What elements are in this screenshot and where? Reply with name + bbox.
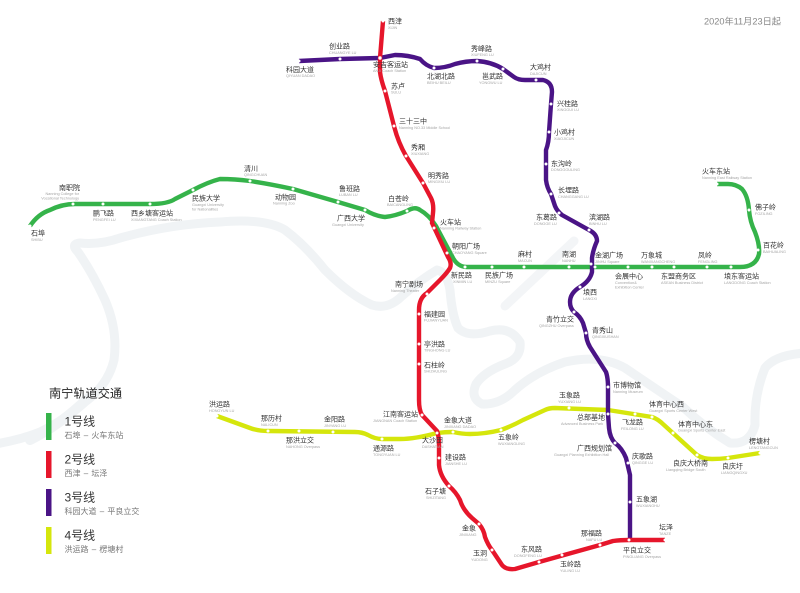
station labels: LANGDONG Coach Station [724, 281, 771, 285]
station labels: 白苍岭 [388, 194, 409, 203]
legend [46, 386, 139, 554]
station labels: TINGHONG LU [424, 348, 451, 352]
station labels: 体育中心东 [678, 420, 713, 428]
station labels: MINGXIU LU [428, 180, 450, 184]
station labels: 鹏飞路 [93, 208, 114, 218]
station labels: 金象 [462, 524, 476, 532]
station labels: XINGGUI LU [557, 108, 579, 112]
station labels: YUXIANG LU [558, 400, 581, 404]
station labels: BINHU LU [589, 222, 607, 226]
station labels: 新民路 [451, 270, 472, 280]
station labels: CHAOYANG Square [452, 251, 487, 255]
station labels: NANHU [562, 259, 576, 263]
station labels: 玉洞 [473, 548, 487, 558]
legend: line 1 [46, 413, 123, 440]
station labels: 广西大学 [337, 214, 365, 222]
station labels: DONGGE LU [534, 222, 557, 226]
station labels: 滨湖路 [589, 212, 610, 222]
station labels: CHUANGYE LU [329, 51, 357, 55]
station labels: 百花岭 [763, 240, 784, 250]
station labels: XIAOJICUN [554, 137, 575, 141]
station labels: 市博物馆 [613, 380, 641, 390]
station labels: 青竹立交 [546, 314, 574, 324]
station labels: SULU [391, 90, 401, 94]
station labels: 麻村 [518, 250, 532, 258]
station labels: 石子塘 [425, 486, 446, 496]
station labels: SHIBU [31, 238, 43, 242]
legend: line 2: 西津 – 坛泽 [64, 468, 107, 478]
station labels: FUJIANYUAN [424, 318, 448, 322]
station labels: 秀厢 [411, 142, 425, 152]
station labels: LUBAN LU [339, 193, 358, 197]
station labels: 南职院 [59, 183, 80, 192]
station labels: 大鸡村 [530, 62, 551, 72]
station labels: Nanning Museum [613, 390, 643, 394]
station labels: DASHATIAN [422, 445, 444, 449]
station labels: 庆歌路 [632, 452, 653, 460]
station labels: DAJICUN [530, 72, 547, 76]
station labels: Nanning Railway Station [440, 226, 481, 230]
station labels: Advanced Business Park [561, 422, 603, 426]
station labels: 总部基地 [577, 412, 605, 422]
station labels: 明秀路 [428, 171, 449, 180]
legend: line 4: 洪运路 – 楞塘村 [64, 544, 123, 554]
station labels: YONGWU LU [479, 81, 503, 85]
station labels: 兴桂路 [557, 99, 578, 108]
station labels: 苏卢 [391, 82, 405, 90]
station labels: 埌东客运站 [724, 272, 759, 280]
station labels: 小鸡村 [554, 128, 575, 136]
station labels: DONGGOULING [551, 168, 580, 172]
line 4 yellow [217, 408, 760, 459]
station labels: XIJIN [388, 26, 398, 30]
station labels: 北湖北路 [427, 72, 455, 80]
station labels: 那洪立交 [286, 436, 314, 444]
station labels: BEIHU BEILU [427, 81, 451, 85]
station labels: MINZU Square [485, 280, 510, 284]
station labels: 科园大道 [286, 65, 314, 74]
station labels: 秀峰路 [471, 44, 492, 53]
station labels: 朝阳广场 [452, 242, 480, 250]
station labels: 良庆圩 [722, 462, 743, 470]
station labels: Convention& [615, 281, 637, 285]
station labels: 会展中心 [615, 272, 643, 280]
station labels: XIXIANGTANG Coach Station [131, 218, 182, 222]
station labels: 三十三中 [399, 116, 427, 126]
legend: line 4: 4号线 [64, 528, 95, 542]
station labels: 坛泽 [659, 522, 673, 532]
legend: line 2 [46, 451, 107, 478]
station labels: FENGLING [698, 260, 717, 264]
station labels: QINGCHUAN [244, 173, 267, 177]
station labels: 那历村 [261, 414, 282, 422]
station labels: Guangxi University [192, 203, 224, 207]
station labels: 江南客运站 [383, 410, 418, 418]
station labels: ASEAN Business District [661, 281, 704, 285]
station labels: 平良立交 [623, 546, 651, 554]
station labels: JIANSHE LU [445, 462, 467, 466]
station labels: 东沟岭 [551, 159, 572, 168]
station labels: Vocational Technology [41, 196, 79, 200]
station labels: NAFU LU [586, 538, 603, 542]
station labels: JINXIANG DADAO [444, 425, 476, 429]
station labels: YUDONG [471, 558, 488, 562]
station labels: 良庆大桥南 [673, 458, 708, 468]
station labels: XINMIN LU [453, 280, 472, 284]
station labels: 大沙田 [422, 436, 443, 444]
station labels: 五象岭 [498, 432, 519, 442]
station labels: 飞龙路 [622, 418, 643, 426]
station labels: 鲁班路 [339, 184, 360, 193]
station labels: Liangqing Bridge South [666, 468, 705, 472]
date: 2020年11月23日起 [704, 16, 781, 26]
station labels: 洪运路 [209, 400, 230, 408]
station labels: 动物园 [275, 192, 296, 202]
station labels: Guangxi Sports Center West [649, 409, 698, 413]
station labels: DONGFENG LU [514, 554, 542, 558]
station labels: Nanning NO.33 Middle School [399, 126, 450, 130]
station labels: 万象城 [641, 250, 662, 260]
station labels: 那福路 [581, 528, 602, 538]
station labels: 民族广场 [485, 270, 513, 280]
station labels: FOZILING [755, 212, 773, 216]
station labels: 东风路 [521, 544, 542, 554]
station labels: JINHU Square [595, 260, 619, 264]
station labels: PINGLIANG Overpass [623, 555, 661, 559]
station labels: YULING LU [560, 569, 580, 573]
station labels: 体育中心西 [649, 400, 684, 408]
station labels: CHANGGANG LU [558, 195, 589, 199]
station labels: SHIZITANG [426, 496, 446, 500]
station labels: JIANGNAN Coach Station [373, 419, 417, 423]
station labels: TONGYUAN LU [373, 453, 401, 457]
station labels: 东葛路 [536, 212, 557, 222]
river [0, 221, 800, 444]
station labels: Guangxi Planning Exhibition Hall [554, 453, 609, 457]
legend: line 3: 3号线 [64, 490, 95, 504]
station labels: NALICUN [261, 423, 278, 427]
station labels: XIUXIANG [411, 152, 429, 156]
station labels: HONGYUN LU [209, 409, 235, 413]
station labels: 玉岭路 [560, 560, 581, 568]
station labels: WUXIANGLING [498, 442, 525, 446]
line 3 purple [299, 55, 630, 540]
legend: line 3: 科园大道 – 平良立交 [64, 506, 139, 516]
station labels: QINGXIUSHAN [592, 335, 619, 339]
station labels: ANJI Coach Station [373, 69, 406, 73]
station labels: TANZE [659, 532, 672, 536]
station labels: for Nationalities [192, 208, 218, 212]
station labels: 邕武路 [482, 72, 503, 80]
station labels: 石埠 [31, 228, 45, 238]
station labels: 亭洪路 [424, 340, 445, 348]
station labels: BAIHUALING [763, 250, 786, 254]
station labels: FEILONG LU [621, 427, 644, 431]
station labels: Guangxi Sports Center East [678, 428, 726, 432]
legend: line 1: 石埠 – 火车东站 [64, 430, 123, 440]
station labels: PENGFEI LU [93, 218, 116, 222]
station labels: XIUFENG LU [471, 53, 494, 57]
station labels: QINGZHU Overpass [539, 324, 574, 328]
station labels: 佛子岭 [755, 202, 776, 212]
station labels: 石柱岭 [424, 360, 445, 370]
station labels: Nanning College for [45, 192, 80, 196]
station labels: LIANGQINGXU [721, 471, 748, 475]
station labels: JINXIANG [459, 533, 477, 537]
station labels: BAICANGLING [387, 203, 413, 207]
station labels: 通源路 [373, 444, 394, 452]
station labels: LANGXI [583, 297, 597, 301]
station labels: 埌西 [583, 288, 597, 296]
legend: line 4 [46, 527, 123, 554]
station labels: NAHONG Overpass [286, 445, 320, 449]
line 2 red [380, 21, 665, 569]
station labels: 金阳路 [324, 414, 345, 424]
station labels: Nanning East Railway Station [702, 176, 752, 180]
station labels: LENGTANGCUN [749, 446, 778, 450]
station labels: Nanning Theater [391, 289, 420, 293]
station labels: 西乡塘客运站 [131, 208, 173, 218]
station labels: 凤岭 [698, 250, 712, 260]
station labels: 楞塘村 [749, 436, 770, 446]
station labels: Nanning Zoo [273, 202, 295, 206]
station labels: 清川 [244, 164, 258, 173]
station labels: JINYANG LU [324, 424, 346, 428]
station labels: QINGGE LU [632, 461, 653, 465]
station labels: Exhibition Center [615, 286, 645, 290]
station labels: 火车东站 [702, 166, 730, 176]
station labels: 南湖 [562, 250, 576, 258]
station labels: 建设路 [445, 452, 466, 462]
station labels: WANXIANGCHENG [641, 260, 675, 264]
line 1 green [30, 179, 759, 267]
station labels: 东盟商务区 [661, 272, 696, 280]
station labels: 广西规划馆 [577, 444, 612, 452]
legend: line 3 [46, 489, 139, 516]
legend title: 南宁轨道交通 [49, 386, 122, 400]
legend: line 2: 2号线 [64, 452, 95, 466]
station labels: 青秀山 [592, 326, 613, 334]
station labels: 金湖广场 [595, 250, 623, 260]
station labels: 金象大道 [444, 416, 472, 424]
station labels: Guangxi University [332, 223, 364, 227]
station labels: 安吉客运站 [373, 60, 408, 69]
legend: line 1: 1号线 [64, 414, 95, 428]
station labels: 玉象路 [559, 390, 580, 400]
station labels: 火车站 [440, 218, 461, 226]
station labels: QIYUAN DADAO [286, 74, 315, 78]
station labels: MACUN [518, 259, 532, 263]
station labels: WUXIANGHU [636, 504, 660, 508]
station labels: 长堽路 [558, 186, 579, 194]
station labels: 福建园 [424, 310, 445, 318]
station labels: 创业路 [329, 42, 350, 50]
station labels: 民族大学 [192, 194, 220, 202]
station labels: 西津 [388, 18, 402, 26]
station labels: SHIZHULING [424, 370, 447, 374]
station labels: 南宁剧场 [395, 280, 423, 288]
station labels: 五象湖 [636, 494, 657, 504]
